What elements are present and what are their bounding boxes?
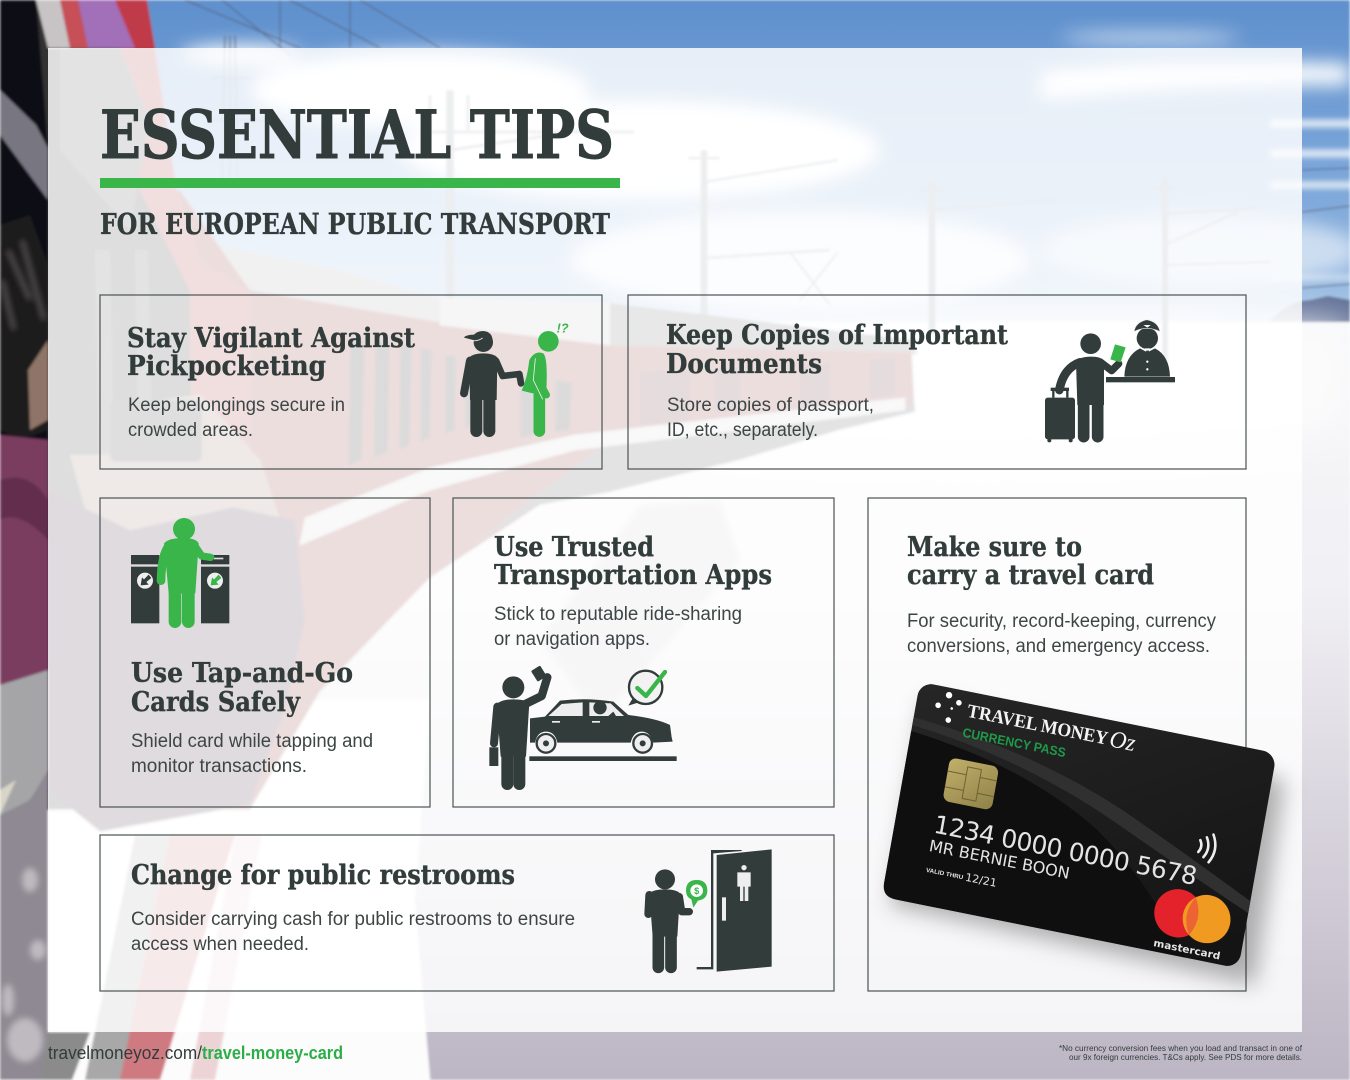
- text: pickpocketing advice: [128, 395, 345, 441]
- heading: tap-and-go: Use Tap-and-Go: [131, 658, 353, 689]
- heading: trusted apps: Transportation Apps: [494, 560, 772, 591]
- icon: person hailing car with phone: [489, 665, 677, 784]
- subtitle: FOR EUROPEAN PUBLIC TRANSPORT: [100, 207, 611, 241]
- text: restrooms advice: [131, 909, 575, 955]
- footer: website link: travelmoneyoz.com/travel-money-card: [48, 1043, 343, 1063]
- footer: fine print: [1059, 1044, 1303, 1062]
- train: [190, 240, 918, 355]
- heading: documents: [666, 320, 1009, 380]
- heading: restrooms: Change for public restrooms: [131, 860, 515, 891]
- panel: travel card tip: [868, 498, 1285, 991]
- text: restrooms advice: access when needed.: [131, 934, 309, 955]
- text: tap-and-go advice: Shield card while tapping and: [131, 731, 373, 752]
- green title underline: [100, 178, 620, 188]
- text: documents advice: ID, etc., separately.: [667, 420, 818, 441]
- text: travel card advice: For security, record-keeping, currency: [907, 611, 1216, 632]
- jacket: [48, 490, 305, 832]
- near carriage and window frame: [100, 0, 250, 810]
- text: trusted apps advice: or navigation apps.: [494, 629, 650, 650]
- heading: trusted apps: Use Trusted: [494, 532, 654, 563]
- heading: travel card: carry a travel card: [907, 560, 1154, 591]
- heading: documents: Documents: [666, 349, 822, 380]
- panel: pickpocketing tip: [100, 295, 602, 469]
- text: documents advice: [667, 395, 874, 441]
- illustration: travel money card: 12/21: [964, 871, 998, 890]
- heading: pickpocketing: Pickpocketing: [127, 351, 326, 382]
- margin details outside panel: [0, 0, 48, 760]
- heading: travel card: Make sure to: [907, 532, 1082, 563]
- heading: tap-and-go: [131, 658, 353, 718]
- illustration: travel money card: VALID THRU: [925, 868, 964, 881]
- heading: tap-and-go: Cards Safely: [131, 687, 301, 718]
- text: tap-and-go advice: [131, 731, 373, 777]
- footer: fine print: our 9x foreign currencies. T&Cs apply. See PDS for more details.: [1069, 1053, 1302, 1062]
- text: tap-and-go advice: monitor transactions.: [131, 756, 307, 777]
- text: trusted apps advice: [494, 604, 742, 650]
- illustration: travel money card: Oz: [1107, 726, 1138, 757]
- illustration: travel money card: 1234 0000 0000 5678: [932, 810, 1199, 891]
- text: trusted apps advice: Stick to reputable ride-sharing: [494, 604, 742, 625]
- illustration: travel money card: MR BERNIE BOON: [928, 836, 1071, 883]
- icon: traveller showing passport to officer: [1045, 320, 1175, 442]
- illustration: travel money card: CURRENCY PASS: [961, 725, 1067, 760]
- icon: pickpocket: !?: [557, 321, 569, 335]
- panel: restroom change tip: [100, 835, 834, 991]
- icon: pickpocket: [464, 321, 569, 431]
- panel: trusted apps tip: [453, 498, 834, 807]
- illustration: travel money card: mastercard: [1153, 938, 1221, 962]
- lower train stripes: [85, 835, 170, 1080]
- poles and wires: [185, 0, 1350, 370]
- footer: fine print: *No currency conversion fees when you load and transact in one of: [1059, 1044, 1303, 1053]
- hand and phone: [70, 395, 280, 610]
- heading: trusted apps: [494, 532, 772, 591]
- illustration: travel money card: [882, 682, 1277, 968]
- heading: pickpocketing: [127, 323, 416, 382]
- illustration: travel money card: TRAVEL MONEY: [966, 701, 1110, 750]
- title: ESSENTIAL TIPS: [100, 96, 614, 174]
- icon: person with coin at restroom door: $: [694, 886, 700, 896]
- panel: copies of documents tip: [628, 295, 1246, 469]
- heading: travel card: [907, 532, 1154, 591]
- text: restrooms advice: Consider carrying cash for public restrooms to ensure: [131, 909, 575, 930]
- text: travel card advice: conversions, and emergency access.: [907, 636, 1210, 657]
- panel: tap-and-go tip: [100, 498, 430, 807]
- text: pickpocketing advice: crowded areas.: [128, 420, 253, 441]
- text: travel card advice: [907, 611, 1216, 657]
- text: pickpocketing advice: Keep belongings secure in: [128, 395, 345, 416]
- heading: pickpocketing: Stay Vigilant Against: [127, 323, 416, 354]
- icon: person at ticket gates: [131, 518, 229, 623]
- icon: person with coin at restroom door: [648, 849, 772, 972]
- heading: documents: Keep Copies of Important: [666, 320, 1009, 351]
- text: documents advice: Store copies of passport,: [667, 395, 874, 416]
- shadow under card: [890, 700, 1285, 985]
